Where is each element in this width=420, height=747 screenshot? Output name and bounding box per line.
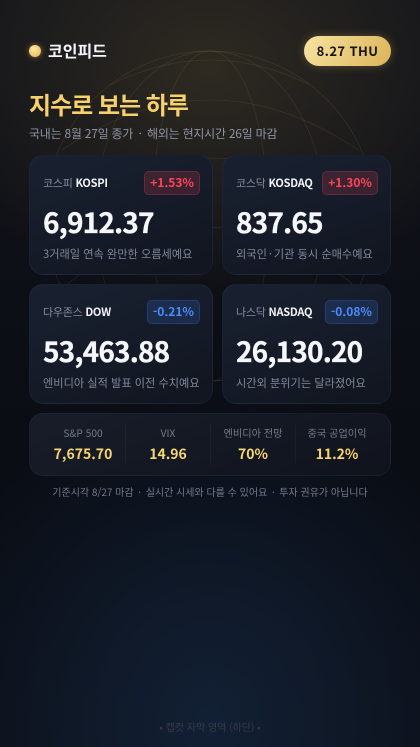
DOW change: -0.21% [153,303,194,320]
brand name: 코인피드 [48,38,107,62]
disclaimer: 기준시각 8/27 마감 실시간 시세와 다를 수 있어요 투자 권유가 아닙니다 [52,484,368,499]
KOSPI label: 코스피 KOSPI [43,175,108,191]
DOW change [147,300,200,324]
date badge: 8.27 THU [317,41,378,60]
NASDAQ note: 시간외 분위기는 달라졌어요 [236,375,366,391]
stat: China industrial profit: 중국 공업이익 [307,425,367,440]
icon: gold dot [29,45,41,57]
NASDAQ change: -0.08% [331,303,372,320]
KOSPI change [144,171,200,195]
stat: Nvidia outlook: 엔비디아 전망 [223,425,283,440]
caption area note: • 캡컷 자막 영역 (하단) • [159,719,261,734]
subtitle: 국내는 8월 27일 종가 해외는 현지시간 26일 마감 [29,125,277,142]
stat: VIX: VIX [161,425,175,440]
stat: VIX: 14.96 [149,444,187,464]
stat: China industrial profit: 11.2% [316,444,358,464]
KOSPI note: 3거래일 연속 완만한 오름세예요 [43,246,192,262]
NASDAQ change [325,300,378,324]
NASDAQ value: 26,130.20 [236,331,362,371]
stat: S&P 500 [54,425,112,464]
panel: KOSPI [29,155,213,275]
disclaimer: · [272,484,275,499]
title: 지수로 보는 하루 [29,86,188,121]
stat: Nvidia outlook [223,425,283,464]
KOSDAQ label: 코스닥 KOSDAQ [236,175,313,191]
panel: secondary stats [29,413,391,476]
KOSDAQ change [322,171,378,195]
panel: NASDAQ [222,284,391,404]
KOSDAQ change: +1.30% [328,174,372,191]
DOW label: 다우존스 DOW [43,304,111,320]
KOSDAQ note: 외국인 기관 동시 순매수예요 [236,246,373,262]
NASDAQ label: 나스닥 NASDAQ [236,304,312,320]
subtitle: · [139,125,142,142]
panel: DOW [29,284,213,404]
stat: S&P 500: S&P 500 [63,425,103,440]
date badge [304,36,391,66]
stat: Nvidia outlook: 70% [238,444,268,464]
disclaimer: · [138,484,141,499]
KOSPI change: +1.53% [150,174,194,191]
globe background [56,50,364,382]
stat: VIX [149,425,187,464]
DOW value: 53,463.88 [43,331,169,371]
KOSDAQ note: · [269,246,272,262]
DOW note: 엔비디아 실적 발표 이전 수치예요 [43,375,200,391]
stat: China industrial profit [307,425,367,464]
panel: KOSDAQ [222,155,391,275]
KOSDAQ value: 837.65 [236,202,323,242]
KOSPI value: 6,912.37 [43,202,154,242]
logo [26,38,107,62]
stat: S&P 500: 7,675.70 [54,444,112,464]
